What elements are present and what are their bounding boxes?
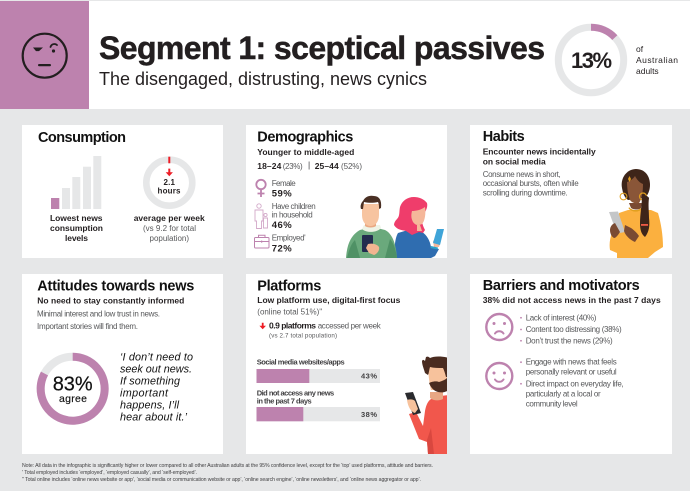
pull quote: If something bbox=[120, 376, 180, 388]
pull quote bbox=[120, 352, 193, 424]
list: motivators bbox=[520, 358, 624, 409]
bar: did not access any news: 38% bbox=[361, 410, 377, 419]
donut: 13 percent of Australian adults: Australian bbox=[636, 55, 678, 65]
illustration: woman with braid bbox=[609, 169, 663, 258]
pull quote: happens, I’ll bbox=[120, 400, 180, 412]
stat: female: Female bbox=[272, 179, 296, 188]
subheading: did not access news: 38% did not access news in the past 7 days bbox=[483, 295, 661, 305]
pull quote: seek out news. bbox=[120, 364, 192, 376]
stat: 0.9 platforms per week: accessed per week bbox=[318, 321, 382, 330]
list: motivators: particularly at a local or bbox=[526, 390, 601, 399]
age groups: (52%) bbox=[341, 162, 362, 171]
text: habits description bbox=[483, 170, 579, 197]
ring: 2.1 hours per week: 2.1 bbox=[164, 178, 176, 187]
subheading: encounter news incidentally: on social media bbox=[483, 156, 546, 166]
donut: 13 percent of Australian adults bbox=[558, 27, 678, 93]
list: motivators: community level bbox=[526, 400, 578, 409]
list: barriers: Don’t trust the news (29%) bbox=[526, 336, 613, 345]
stat: 0.9 platforms per week: (vs 2.7 total population) bbox=[269, 332, 337, 339]
icon: children in household bbox=[255, 204, 268, 228]
subheading: low platform use bbox=[257, 295, 401, 317]
donut: 13 percent of Australian adults: adults bbox=[636, 66, 659, 76]
stat: employed: 72% bbox=[272, 244, 292, 254]
stat: children in household: Have children bbox=[272, 202, 316, 211]
subheading: low platform use: (online total 51%)'' bbox=[257, 308, 323, 317]
panel: platforms bbox=[246, 274, 449, 454]
list: motivators: Engage with news that feels bbox=[526, 358, 617, 367]
donut: 13 percent of Australian adults: of bbox=[636, 44, 644, 54]
ring: 83 percent agree bbox=[41, 357, 105, 421]
panel: habits bbox=[470, 125, 672, 258]
header banner bbox=[0, 1, 690, 109]
illustration: woman with phone bbox=[394, 197, 444, 258]
list: barriers: Lack of interest (40%) bbox=[526, 313, 597, 322]
footnotes bbox=[22, 463, 433, 483]
text: attitudes description bbox=[37, 310, 160, 331]
panel: attitudes towards news bbox=[22, 274, 223, 454]
icon: happy face bbox=[486, 363, 512, 389]
purple header block with face icon bbox=[0, 1, 89, 109]
bar icon: lowest news consumption bbox=[51, 156, 101, 209]
stat: employed: Employed' bbox=[272, 234, 306, 242]
text: habits description: scrolling during downtime. bbox=[483, 188, 568, 197]
ring: 2.1 hours per week: hours bbox=[158, 186, 181, 196]
label: lowest news consumption levels bbox=[50, 213, 103, 243]
stat: 0.9 platforms per week: 0.9 platforms bbox=[269, 320, 316, 330]
subheading: encounter news incidentally bbox=[483, 147, 596, 166]
label: lowest news consumption levels: consumption bbox=[50, 223, 103, 233]
subheading: encounter news incidentally: Encounter news incidentally bbox=[483, 147, 596, 157]
pull quote: ‘I don’t need to bbox=[120, 352, 193, 364]
panel: demographics bbox=[246, 125, 447, 258]
footnotes: Note: All data in the infographic is significantly higher or lower compared to all other Australian adults at the 95% confidence level, except for the ‘top’ used platforms, attitude and barriers. bbox=[22, 463, 433, 469]
stat: children in household bbox=[272, 202, 316, 231]
illustration: bearded man with phone bbox=[405, 356, 449, 454]
subheading: no need to stay informed: No need to stay constantly informed bbox=[37, 295, 184, 305]
label: lowest news consumption levels: levels bbox=[65, 233, 88, 243]
label: average per week: (vs 9.2 for total bbox=[143, 224, 196, 233]
heading: habits: Habits bbox=[483, 129, 525, 145]
stat: female bbox=[272, 179, 296, 200]
stat: female: 59% bbox=[272, 189, 292, 200]
panel: consumption bbox=[22, 125, 223, 258]
donut: 13 percent of Australian adults: 13% bbox=[571, 48, 612, 73]
panel: barriers and motivators bbox=[470, 274, 672, 454]
footnotes: ' Total employed includes ‘employed’, ‘employed casually’, and ‘self-employed’. bbox=[22, 470, 197, 476]
footnotes: '' Total online includes ‘online news website or app’, ‘social media or communication website or app’, ‘online search engine’, ‘online newsletters’, and ‘online news aggregator or app’. bbox=[22, 477, 421, 483]
stat: employed bbox=[272, 234, 306, 254]
icon: sad face bbox=[486, 314, 512, 340]
bar: did not access any news: Did not access any news bbox=[257, 389, 334, 398]
age groups: (23%) bbox=[283, 162, 303, 171]
label: average per week: average per week bbox=[134, 213, 205, 223]
text: attitudes description: Minimal interest and low trust in news. bbox=[37, 310, 160, 319]
label: lowest news consumption levels: Lowest news bbox=[50, 213, 103, 223]
ring: 2.1 hours per week bbox=[146, 157, 192, 206]
text: attitudes description: Important stories will find them. bbox=[37, 322, 138, 331]
text: habits description: Consume news in short, bbox=[483, 170, 561, 179]
age groups: 25–44 bbox=[315, 161, 339, 171]
pull quote: hear about it.’ bbox=[120, 412, 188, 424]
illustration: man with phone bbox=[346, 196, 397, 258]
stat: children in household: 46% bbox=[272, 220, 292, 231]
subheading: low platform use: Low platform use, digital-first focus bbox=[257, 295, 401, 305]
stat: children in household: in household bbox=[272, 210, 313, 219]
heading: platforms: Platforms bbox=[257, 279, 321, 295]
list: barriers bbox=[520, 313, 622, 345]
title: Segment 1: sceptical passives bbox=[99, 30, 545, 66]
label: average per week: population) bbox=[150, 234, 189, 243]
age groups bbox=[257, 161, 362, 171]
subtitle: The disengaged, distrusting, news cynics bbox=[99, 69, 427, 89]
bar: did not access any news bbox=[256, 389, 380, 421]
stat: 0.9 platforms per week bbox=[259, 320, 382, 339]
heading: barriers and motivators: Barriers and motivators bbox=[483, 278, 640, 294]
heading: consumption: Consumption bbox=[38, 130, 126, 146]
list: motivators: personally relevant or useful bbox=[526, 368, 617, 377]
label: average per week bbox=[134, 213, 205, 243]
pull quote: important bbox=[120, 388, 169, 400]
icon: briefcase bbox=[254, 235, 269, 248]
list: motivators: Direct impact on everyday life, bbox=[526, 379, 624, 388]
subheading: younger to middle-aged: Younger to middle-aged bbox=[257, 147, 354, 157]
ring: 83 percent agree: agree bbox=[59, 393, 87, 405]
ring: 83 percent agree: 83% bbox=[53, 374, 93, 396]
icon: female bbox=[256, 180, 266, 197]
list: barriers: Content too distressing (38%) bbox=[526, 325, 622, 334]
age groups: 18–24 bbox=[257, 161, 282, 171]
heading: demographics: Demographics bbox=[257, 130, 353, 146]
heading: attitudes towards news: Attitudes towards news bbox=[37, 279, 194, 295]
bar: social media websites/apps bbox=[256, 357, 380, 383]
bar: social media websites/apps: Social media websites/apps bbox=[257, 357, 345, 366]
bar: social media websites/apps: 43% bbox=[361, 372, 377, 380]
bar: did not access any news: in the past 7 days bbox=[257, 396, 312, 406]
text: habits description: occasional bursts, often while bbox=[483, 179, 579, 188]
